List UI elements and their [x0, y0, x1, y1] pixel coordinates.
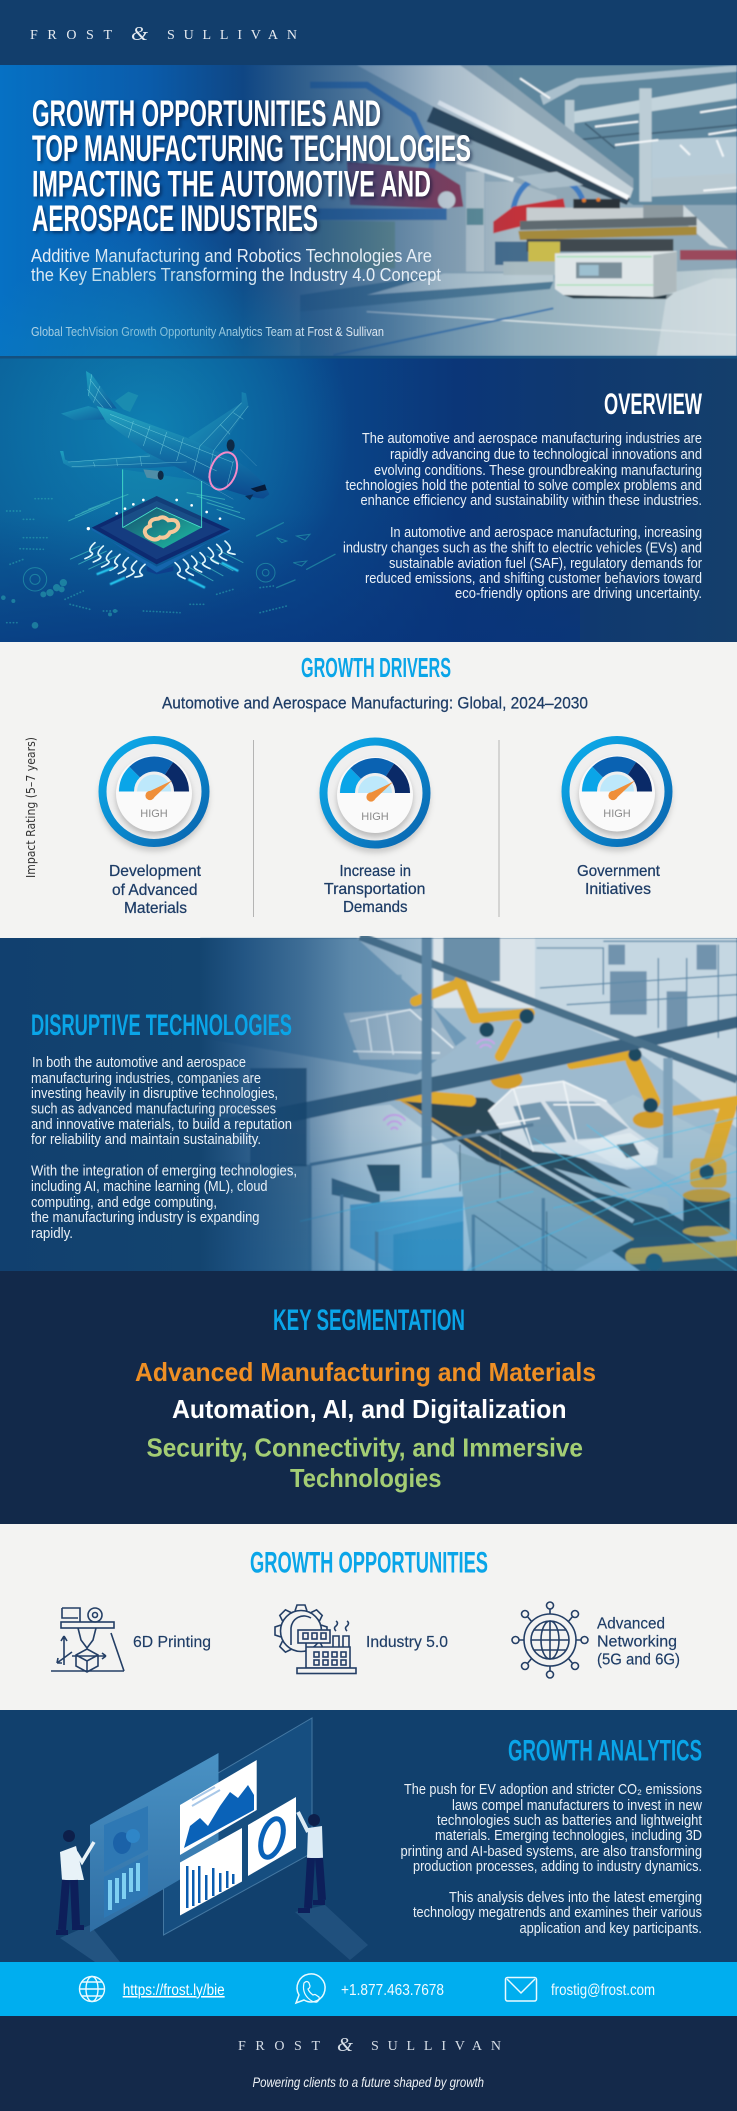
label: advanced networking: Networking: [597, 1634, 677, 1650]
disruptive body text: the manufacturing industry is expanding: [31, 1210, 260, 1226]
footer: [0, 2016, 737, 2111]
heading: key segmentation: KEY SEGMENTATION: [273, 1304, 465, 1337]
overview body text: eco-friendly options are driving uncertainty.: [455, 586, 702, 602]
chart subtitle: Automotive and Aerospace Manufacturing: Global, 2024–2030: [162, 694, 588, 712]
label: advanced networking: Advanced: [597, 1616, 665, 1632]
analytics body text: technologies such as batteries and lightweight: [437, 1813, 702, 1829]
icon: web globe: [80, 1976, 104, 2002]
analytics body text: application and key participants.: [520, 1921, 702, 1937]
gauge label 2: Transportation: [324, 881, 426, 898]
main title: [32, 92, 471, 239]
airplane: [60, 371, 269, 500]
footer brand logo: SULLIVAN: [371, 2039, 501, 2054]
text: phone number: +1.877.463.7678: [341, 1982, 444, 1999]
brand logo: FROST: [30, 28, 112, 43]
icon: mail: [506, 1978, 536, 2001]
gauge label 1: [109, 863, 202, 917]
gauge: government initiatives: HIGH: [603, 808, 631, 820]
panel: overview: [0, 230, 737, 642]
gauge label 2: Demands: [343, 899, 408, 916]
panel: growth drivers: [0, 642, 737, 938]
analytics body text: [400, 1782, 702, 1937]
brand logo: [30, 23, 297, 45]
disruptive body text: such as advanced manufacturing processes: [31, 1102, 276, 1118]
author line: Global TechVision Growth Opportunity Analytics Team at Frost & Sullivan: [31, 325, 384, 339]
tagline: Powering clients to a future shaped by growth: [252, 2074, 484, 2090]
icon: factory gear: [275, 1605, 356, 1674]
disruptive body text: [31, 1055, 297, 1242]
overview body text: technologies hold the potential to solve complex problems and: [346, 478, 702, 494]
label: advanced networking: (5G and 6G): [597, 1652, 680, 1668]
disruptive body text: manufacturing industries, companies are: [31, 1071, 261, 1087]
analytics body text: This analysis delves into the latest emerging: [449, 1890, 702, 1906]
circuit background dots: [1, 499, 335, 629]
icon: phone: [296, 1974, 325, 2003]
illustration: analysts at dashboards: [56, 1718, 368, 1962]
figure: woman: [56, 1830, 94, 1935]
overview body text: reduced emissions, and shifting customer behaviors toward: [365, 571, 702, 587]
brand logo: &: [131, 23, 148, 45]
link: website: https://frost.ly/bie: [123, 1982, 225, 1999]
gauge label 3: Initiatives: [585, 881, 651, 898]
analytics body text: laws compel manufacturers to invest in new: [452, 1798, 702, 1814]
heading: growth opportunities: GROWTH OPPORTUNITIES: [250, 1546, 488, 1580]
analytics body text: materials. Emerging technologies, including 3D: [435, 1828, 702, 1844]
gauge label 1: Development: [109, 863, 202, 880]
panel: disruptive technologies: [0, 936, 737, 1271]
gauge label 1: of Advanced: [112, 882, 198, 899]
hero panel: [0, 65, 737, 356]
disruptive body text: for reliability and maintain sustainability.: [31, 1132, 261, 1148]
icon: airplane over chip: [1, 371, 335, 629]
analytics body text: printing and AI-based systems, are also transforming: [400, 1844, 702, 1860]
gauge: increase in transportation demands: HIGH: [361, 811, 389, 823]
overview body text: rapidly advancing due to technological innovations and: [390, 447, 702, 463]
panel: growth opportunities: [0, 1524, 737, 1710]
disruptive body text: including AI, machine learning (ML), cloud: [31, 1179, 268, 1195]
gauge label 3: Government: [577, 863, 661, 880]
axis label: impact rating: Impact Rating (5–7 years): [24, 737, 38, 878]
analytics body text: production processes, adding to industry dynamics.: [413, 1859, 702, 1875]
overview body text: [343, 431, 702, 602]
disruptive body text: computing, and edge computing,: [31, 1195, 217, 1211]
label: 6D printing: 6D Printing: [133, 1634, 211, 1651]
gauge: development of advanced materials: HIGH: [140, 808, 168, 820]
gauge: development of advanced materials: [99, 740, 209, 852]
icon: 3D printer: [51, 1608, 124, 1672]
overview body text: enhance efficiency and sustainability within these industries.: [360, 493, 702, 509]
subtitle: Additive Manufacturing and Robotics Technologies Are: [31, 246, 432, 266]
gauge label 3: [577, 863, 661, 898]
disruptive body text: and innovative materials, to build a reputation: [31, 1117, 292, 1133]
label: industry 5.0: Industry 5.0: [366, 1634, 448, 1651]
panel: key segmentation: [0, 1271, 737, 1524]
hero factory photo: [0, 65, 737, 356]
overview body text: evolving conditions. These groundbreaking manufacturing: [374, 463, 702, 479]
disruptive body text: With the integration of emerging technologies,: [31, 1164, 297, 1180]
panel: growth analytics: [0, 1710, 737, 1962]
chip: [68, 469, 245, 588]
label: advanced networking: [597, 1616, 680, 1668]
footer brand logo: [238, 2034, 501, 2056]
main title: AEROSPACE INDUSTRIES: [32, 197, 318, 239]
subtitle: [31, 246, 441, 285]
overview body text: sustainable aviation fuel (SAF), regulatory demands for: [389, 556, 702, 572]
header band: [0, 0, 737, 65]
segment: security: Security, Connectivity, and Immersive: [146, 1432, 583, 1462]
analytics body text: technology megatrends and examines their various: [413, 1905, 702, 1921]
analytics body text: The push for EV adoption and stricter CO₂ emissions: [404, 1782, 702, 1798]
main title: IMPACTING THE AUTOMOTIVE AND: [32, 162, 431, 204]
gauge label 2: [324, 863, 426, 916]
main title: GROWTH OPPORTUNITIES AND: [32, 92, 381, 134]
footer brand logo: FROST: [238, 2039, 320, 2054]
gauge: increase in transportation demands: [320, 742, 430, 853]
factory robot photo: [200, 936, 737, 1271]
gauge label 2: Increase in: [340, 863, 411, 880]
gauge: government initiatives: [562, 740, 672, 852]
disruptive body text: investing heavily in disruptive technologies,: [31, 1086, 278, 1102]
segment: security: Technologies: [290, 1463, 442, 1493]
overview body text: In automotive and aerospace manufacturing, increasing: [390, 525, 702, 541]
contact bar: [0, 1962, 737, 2016]
gauge label 1: Materials: [124, 900, 187, 917]
segment: advanced manufacturing: Advanced Manufacturing and Materials: [135, 1357, 596, 1387]
figure: man: [298, 1812, 325, 1913]
heading: disruptive technologies: DISRUPTIVE TECHNOLOGIES: [31, 1009, 292, 1042]
heading: growth drivers: GROWTH DRIVERS: [301, 652, 451, 683]
icon: network globe: [512, 1602, 588, 1678]
subtitle: the Key Enablers Transforming the Industry 4.0 Concept: [31, 265, 441, 285]
brand logo: SULLIVAN: [167, 28, 297, 43]
disruptive body text: rapidly.: [31, 1226, 73, 1242]
segment: security: [146, 1432, 583, 1493]
disruptive body text: In both the automotive and aerospace: [32, 1055, 246, 1071]
footer brand logo: &: [337, 2034, 353, 2056]
text: email: frostig@frost.com: [551, 1982, 655, 1999]
segment: automation: Automation, AI, and Digitalization: [172, 1394, 566, 1424]
